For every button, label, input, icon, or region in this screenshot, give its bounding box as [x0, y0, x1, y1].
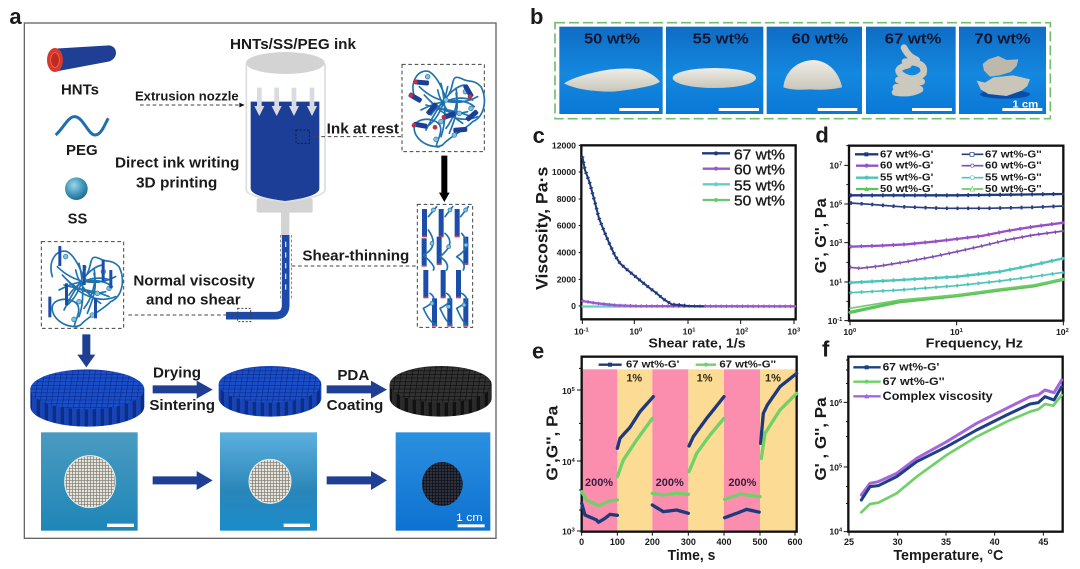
label: normal viscosity and no shear	[128, 273, 255, 315]
label: ink at rest: Ink at rest	[327, 121, 399, 137]
f y axis title: G' , G'', Pa	[813, 397, 830, 481]
c legend: 50 wt%	[734, 193, 785, 209]
e x axis tick labels: 300	[681, 537, 696, 547]
panel c: viscosity chart	[532, 123, 800, 351]
label: normal viscosity and no shear: and no shear	[146, 292, 241, 308]
d y axis title: G', G'', Pa	[813, 198, 830, 273]
e y axis tick labels: 3	[572, 528, 575, 534]
photo: 70 wt%	[959, 27, 1046, 114]
d legend	[855, 149, 1042, 195]
panel b: ink photos	[530, 4, 1050, 119]
arrow: drying sintering	[149, 366, 215, 414]
e x axis tick labels: 0	[579, 537, 584, 547]
label: direct ink writing: Direct ink writing	[115, 156, 239, 172]
d legend: 50 wt%-G''	[985, 184, 1042, 195]
d y axis tick labels: -1	[837, 317, 842, 323]
f legend: 67 wt%-G''	[883, 376, 945, 388]
d y axis tick labels: 10	[829, 161, 839, 171]
panel a letter: a	[9, 4, 22, 29]
label: normal viscosity and no shear: Normal viscosity	[133, 273, 255, 289]
panel a: ink writing process	[9, 4, 496, 538]
d legend: 67 wt%-G'	[880, 149, 933, 160]
photo: 55 wt%: 55 wt%	[693, 31, 749, 47]
e x axis tick labels: 600	[787, 537, 802, 547]
f y axis tick labels: 10	[829, 398, 839, 408]
photo: sintered scaffold	[220, 432, 317, 531]
e band labels: 200%	[728, 477, 757, 489]
c curves	[582, 157, 795, 307]
e x axis tick labels: 400	[716, 537, 731, 547]
d legend: 55 wt%-G''	[985, 173, 1042, 184]
nozzle tube	[226, 235, 292, 322]
f y axis tick labels: 5	[839, 464, 842, 470]
d y axis tick labels: 10	[829, 277, 839, 287]
d x axis tick labels	[843, 327, 1069, 337]
photo: coated scaffold: 1 cm	[456, 512, 483, 524]
e legend	[599, 360, 776, 371]
arrow: PDA coating: Coating	[327, 398, 383, 414]
f y axis tick labels: 10	[829, 463, 839, 473]
c y axis tick labels	[552, 140, 576, 311]
c x axis tick labels: 10	[683, 326, 692, 336]
c x axis tick labels: 10	[574, 326, 584, 336]
d x axis tick labels: 0	[853, 328, 856, 334]
photo: printed scaffold	[41, 432, 138, 531]
panel f: modulus vs temperature chart	[813, 337, 1063, 564]
photo: 50 wt%: 50 wt%	[584, 31, 640, 47]
d legend: 50 wt%-G'	[880, 184, 933, 195]
icon: SS sphere	[65, 177, 88, 200]
f x axis tick labels: 30	[893, 537, 903, 547]
e curves G'	[582, 373, 797, 522]
f x axis tick labels: 35	[941, 537, 951, 547]
network: shear-thinning aligned	[417, 204, 473, 327]
label: direct ink writing: 3D printing	[136, 176, 217, 192]
e x axis title: Time, s	[668, 548, 715, 564]
photo: 60 wt%	[767, 27, 862, 114]
label: PEG: PEG	[66, 143, 98, 159]
c x axis tick labels: 10	[735, 326, 745, 336]
c x axis tick labels	[574, 326, 800, 336]
e band labels: 1%	[765, 372, 781, 384]
scaffold: sintered blue	[219, 366, 321, 417]
f x axis tick labels: 45	[1038, 537, 1048, 547]
label: shear-thinning: Shear-thinning	[302, 249, 409, 265]
f legend	[853, 361, 993, 403]
scaffold: coated black	[390, 366, 492, 417]
network: ink at rest	[402, 64, 484, 152]
c y axis tick labels: 0	[571, 301, 576, 311]
f legend: 67 wt%-G'	[883, 361, 940, 373]
d legend: 60 wt%-G''	[985, 161, 1042, 172]
c legend: 60 wt%	[734, 163, 785, 179]
e y axis tick labels: 10	[562, 527, 572, 537]
c y axis tick labels: 12000	[552, 140, 576, 150]
e x axis tick labels: 500	[752, 537, 767, 547]
ink heading: HNTs/SS/PEG ink	[230, 37, 356, 53]
c y axis tick labels: 10000	[552, 167, 576, 177]
e y axis tick labels: 4	[572, 458, 576, 464]
panel f letter: f	[822, 337, 830, 362]
arrow: blue down	[77, 334, 95, 367]
d x axis tick labels: 10	[843, 327, 853, 337]
e band labels	[585, 372, 781, 489]
label: HNTs: HNTs	[61, 83, 99, 99]
arrow: drying sintering: Sintering	[149, 398, 215, 414]
c y axis tick labels: 4000	[557, 248, 576, 258]
scaffold: printed blue	[30, 369, 144, 427]
d axes frame and ticks	[844, 146, 1063, 325]
label: direct ink writing	[115, 156, 239, 192]
e x axis tick labels	[579, 537, 802, 547]
photo: 55 wt%	[666, 27, 763, 114]
e y axis tick labels: 10	[562, 386, 572, 396]
c y axis title: Viscosity, Pa·s	[532, 167, 551, 290]
d legend: 60 wt%-G'	[880, 161, 933, 172]
c y axis tick labels: 6000	[557, 221, 576, 231]
d y axis tick labels: 5	[839, 200, 842, 206]
c x axis tick labels: 0	[639, 327, 642, 333]
d x axis tick labels: 1	[960, 328, 963, 334]
photo: 70 wt%: 1 cm	[1012, 99, 1038, 110]
f axes frame and ticks	[844, 357, 1063, 536]
e axes frame and ticks	[577, 357, 797, 536]
e legend: 67 wt%-G'	[626, 360, 679, 371]
arrow: black down	[439, 156, 450, 202]
arrow: photo 1 to 2	[153, 471, 213, 490]
c legend	[702, 147, 785, 209]
c x axis tick labels: 2	[745, 327, 748, 333]
d legend: 55 wt%-G'	[880, 173, 933, 184]
photo: 70 wt%: 70 wt%	[974, 31, 1031, 47]
c x axis title: Shear rate, 1/s	[648, 336, 746, 351]
arrow: drying sintering: Drying	[153, 366, 201, 382]
c x axis tick labels: -1	[584, 327, 589, 333]
photo: coated scaffold	[396, 432, 490, 531]
panel a frame	[24, 23, 496, 538]
d y axis tick labels	[828, 161, 842, 326]
e legend: 67 wt%-G''	[719, 360, 776, 371]
f legend: Complex viscosity	[883, 390, 993, 403]
panel c letter: c	[533, 123, 545, 148]
d curves	[850, 194, 1063, 312]
e y axis tick labels: 10	[562, 457, 572, 467]
c y axis tick labels: 2000	[557, 274, 576, 284]
f x axis tick labels: 40	[990, 537, 1000, 547]
network: normal viscosity	[41, 242, 124, 328]
e band labels: 200%	[656, 477, 684, 489]
panel b letter: b	[530, 4, 543, 29]
e x axis tick labels: 100	[610, 537, 625, 547]
photo: 67 wt%	[866, 27, 956, 114]
c y axis tick labels: 8000	[557, 194, 576, 204]
c x axis tick labels: 3	[797, 327, 800, 333]
f x axis tick labels	[844, 537, 1048, 547]
label: SS: SS	[68, 212, 87, 228]
f curves	[861, 380, 1062, 512]
icon: PEG wave	[56, 117, 108, 135]
e y axis title: G',G'', Pa	[544, 405, 561, 481]
d legend: 67 wt%-G''	[985, 149, 1042, 160]
c x axis tick labels: 10	[787, 326, 797, 336]
label: extrusion nozzle with arrow: Extrusion nozzle	[135, 90, 239, 104]
d x axis tick labels: 10	[1056, 327, 1066, 337]
d x axis tick labels: 10	[950, 327, 960, 337]
c axes frame and ticks	[579, 145, 796, 324]
e band labels: 1%	[697, 372, 713, 384]
panel d letter: d	[815, 122, 829, 147]
d y axis tick labels: 10	[828, 316, 837, 326]
e band labels: 1%	[626, 372, 642, 384]
panel b dashed frame	[555, 23, 1050, 119]
arrow: photo 2 to 3	[327, 471, 387, 490]
e y axis tick labels	[562, 386, 576, 537]
f y axis tick labels: 6	[839, 399, 842, 405]
f y axis tick labels: 10	[829, 527, 839, 537]
photo: 67 wt%: 67 wt%	[885, 31, 941, 47]
e curves G''	[582, 393, 797, 506]
e band labels: 200%	[585, 477, 613, 489]
c legend: 67 wt%	[734, 147, 785, 163]
icon: HNTs tube	[47, 45, 116, 72]
panel e letter: e	[532, 339, 544, 364]
panel e: strain sweep chart	[532, 339, 802, 564]
photo: 50 wt%	[559, 27, 663, 114]
d y axis tick labels: 10	[829, 238, 839, 248]
d y axis tick labels: 3	[839, 239, 842, 245]
f y axis tick labels: 4	[839, 528, 843, 534]
f x axis tick labels: 25	[844, 537, 854, 547]
f x axis title: Temperature, °C	[893, 548, 1003, 564]
c legend: 55 wt%	[734, 178, 785, 194]
d x axis title: Frequency, Hz	[926, 336, 1023, 351]
d x axis tick labels: 2	[1066, 328, 1069, 334]
e y axis tick labels: 5	[572, 387, 575, 393]
d y axis tick labels: 10	[829, 199, 839, 209]
arrow: PDA coating	[327, 368, 387, 414]
d y axis tick labels: 7	[839, 162, 842, 168]
photo: 60 wt%: 60 wt%	[792, 31, 848, 47]
f y axis tick labels	[829, 398, 843, 537]
arrow: PDA coating: PDA	[337, 368, 369, 384]
c x axis tick labels: 10	[629, 326, 639, 336]
syringe	[246, 52, 325, 237]
e x axis tick labels: 200	[645, 537, 660, 547]
e strain bands	[582, 369, 797, 531]
c x axis tick labels: 1	[692, 327, 695, 333]
d y axis tick labels: 1	[839, 278, 842, 284]
panel d: modulus vs frequency chart	[813, 122, 1069, 351]
